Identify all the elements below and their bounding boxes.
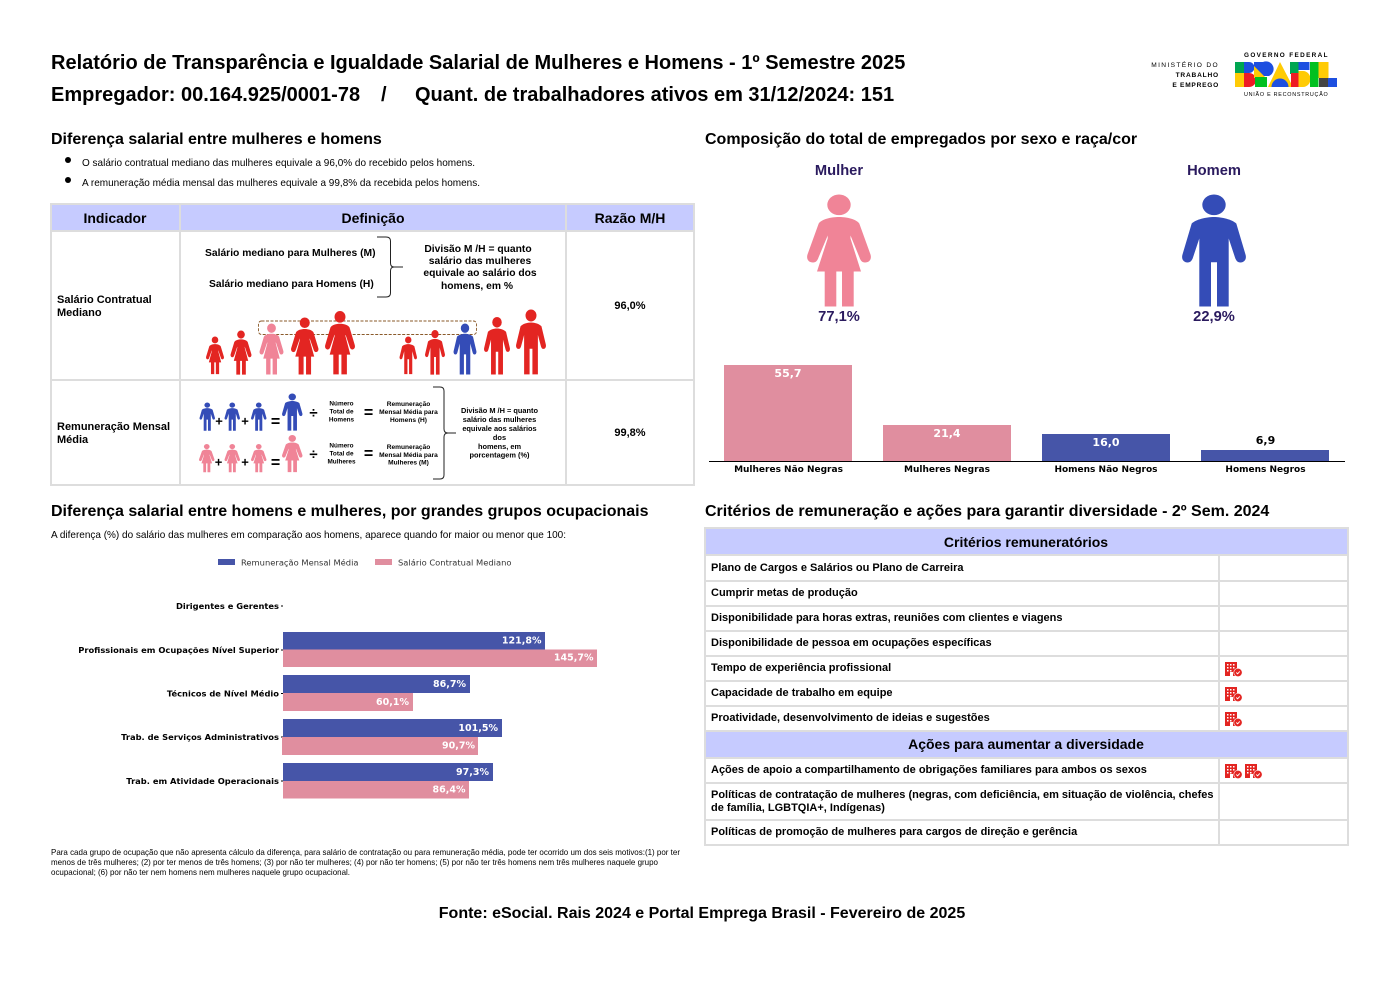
- definition: divisão M/H: equivale aos salários: [462, 424, 537, 433]
- row labels: Mediano: [57, 307, 102, 319]
- criteria rows: Cumprir metas de produção: [711, 587, 858, 599]
- bar chart: grupos ocupacionais: 145,7%: [554, 652, 594, 664]
- bar chart: sexo e raça/cor: Mulheres Negras: [904, 465, 990, 475]
- row labels: Média: [57, 434, 89, 446]
- icons: figures of men by salary: [400, 310, 546, 375]
- definition: remuneração média, homens: ÷: [309, 404, 318, 422]
- legend: Salário Contratual Mediano: [398, 558, 511, 568]
- definition: remuneração média, mulheres: Número: [329, 442, 354, 450]
- definition: remuneração média, homens: [200, 394, 438, 431]
- definition: divisão M/H: porcentagem (%): [470, 450, 530, 460]
- definition: remuneração média, homens: Total de: [329, 408, 354, 416]
- definition: remuneração média, homens: Mensal Média para: [379, 409, 438, 416]
- bar chart: grupos ocupacionais: Técnicos de Nível Médio: [167, 688, 279, 698]
- bar chart: grupos ocupacionais: 121,8%: [502, 636, 542, 646]
- footnote: Para cada grupo de ocupação que não apresenta cálculo da diferença, para salário de contratação ou para remuneração média, pode ter ocorrido um dos seis motivos:(1) por ter: [51, 847, 680, 857]
- definition: remuneração média, mulheres: =: [364, 446, 373, 462]
- panel: homem: Homem: [1187, 163, 1241, 179]
- definition: remuneração média, homens: Remuneração: [387, 401, 430, 408]
- ratio values: [614, 300, 646, 439]
- definition: salário contratual: Divisão M /H = quanto: [424, 244, 532, 255]
- action rows: [711, 764, 1214, 838]
- bar chart: sexo e raça/cor: Mulheres Não Negras: [734, 465, 843, 475]
- definition: remuneração média, mulheres: Mulheres (M): [388, 460, 429, 466]
- chart description: A diferença (%) do salário das mulheres em comparação aos homens, aparece quando for maior ou menor que 100:: [51, 530, 566, 541]
- logo: ministério do trabalho e emprego: [1151, 60, 1219, 89]
- criteria rows: Disponibilidade para horas extras, reuniões com clientes e viagens: [711, 612, 1063, 624]
- heading: composição: Composição do total de empregados por sexo e raça/cor: [705, 131, 1137, 148]
- bar chart: grupos ocupacionais: 60,1%: [376, 697, 409, 708]
- icons: company check: [1225, 662, 1262, 779]
- definition: salário contratual: Salário mediano para Homens (H): [209, 279, 374, 290]
- definition: remuneração média, mulheres: +: [215, 454, 223, 470]
- definition: remuneração média, mulheres: =: [271, 454, 280, 472]
- definition: remuneração média, homens: =: [271, 414, 280, 430]
- definition: remuneração média, homens: =: [364, 404, 373, 422]
- table header: Indicador: [83, 210, 147, 226]
- row labels: [57, 294, 170, 446]
- action rows: Políticas de promoção de mulheres para cargos de direção e gerência: [711, 826, 1078, 838]
- panel: mulher: [807, 163, 871, 325]
- definition: divisão M/H: Divisão M /H = quanto: [461, 406, 538, 415]
- definition: divisão M/H: [433, 387, 538, 479]
- bar chart: grupos ocupacionais: 101,5%: [458, 723, 498, 734]
- logo: ministério do trabalho e emprego: TRABALHO: [1176, 72, 1219, 79]
- logo: governo federal brasil: GOVERNO FEDERAL: [1244, 52, 1329, 59]
- legend: Remuneração Mensal Média: [241, 558, 359, 568]
- definition: remuneração média, mulheres: ÷: [309, 446, 318, 463]
- action rows: Ações de apoio a compartilhamento de obrigações familiares para ambos os sexos: [711, 764, 1147, 776]
- logo: governo federal brasil: [1235, 52, 1337, 98]
- definition: divisão M/H: dos: [493, 433, 506, 442]
- bar chart: grupos ocupacionais: 86,7%: [433, 679, 466, 690]
- criteria rows: Proatividade, desenvolvimento de ideias e sugestões: [711, 712, 990, 724]
- bar chart: sexo e raça/cor: Homens Negros: [1225, 465, 1306, 475]
- title: Quant. de trabalhadores ativos em 31/12/2024: 151: [415, 84, 894, 106]
- heading: diferença salarial: Diferença salarial entre mulheres e homens: [51, 131, 382, 148]
- bar chart: grupos ocupacionais: 86,4%: [433, 784, 466, 796]
- legend: [218, 558, 511, 568]
- definition: remuneração média, homens: Homens: [329, 416, 355, 424]
- definition: remuneração média, mulheres: +: [241, 454, 249, 470]
- definition: divisão M/H: homens, em: [478, 442, 521, 451]
- panel: mulher: Mulher: [815, 163, 863, 179]
- ratio values: 96,0%: [614, 300, 646, 312]
- definition: salário contratual: [205, 237, 537, 297]
- title: Empregador: 00.164.925/0001-78: [51, 84, 360, 106]
- definition: salário contratual: Salário mediano para Mulheres (M): [205, 248, 376, 259]
- criteria rows: Capacidade de trabalho em equipe: [711, 687, 893, 699]
- bar chart: sexo e raça/cor: Homens Não Negros: [1054, 465, 1158, 475]
- definition: salário contratual: homens, em %: [441, 281, 513, 292]
- title: /: [381, 84, 387, 106]
- criteria rows: Tempo de experiência profissional: [711, 662, 891, 674]
- table header: [83, 210, 665, 226]
- bullet list: [65, 157, 480, 189]
- footnote: menos de três mulheres; (2) por ter menos de três homens; (3) por não ter mulheres; (4) por não ter homens; (5) por não ter três homens nem três mulheres naquele grupo: [51, 857, 658, 867]
- header: critérios remuneratórios: Critérios remuneratórios: [944, 534, 1108, 550]
- bar chart: grupos ocupacionais: Profissionais em Ocupações Nível Superior: [78, 645, 280, 655]
- definition: salário contratual: equivale ao salário dos: [423, 268, 537, 279]
- definition: remuneração média, homens: Homens (H): [390, 417, 427, 424]
- criteria rows: [711, 562, 1063, 724]
- table: indicadores: [51, 204, 694, 485]
- bar chart: grupos ocupacionais: 90,7%: [442, 740, 475, 752]
- definition: remuneração média, homens: Número: [329, 400, 354, 408]
- panel: homem: [1182, 163, 1246, 325]
- bar chart: sexo e raça/cor: 16,0: [1092, 436, 1120, 449]
- title: [51, 52, 905, 106]
- bullet list: O salário contratual mediano das mulheres equivale a 96,0% do recebido pelos homens.: [82, 157, 475, 169]
- definition: remuneração média, mulheres: Mulheres: [327, 458, 356, 466]
- bar chart: sexo e raça/cor: 21,4: [933, 427, 961, 440]
- title: Relatório de Transparência e Igualdade Salarial de Mulheres e Homens - 1º Semestre 2025: [51, 52, 905, 74]
- icons: figures of women by salary: [206, 311, 355, 375]
- panel: homem: 22,9%: [1193, 309, 1235, 325]
- table header: Definição: [341, 210, 405, 226]
- definition: remuneração média, mulheres: Remuneração: [387, 444, 430, 451]
- table: critérios e ações: [705, 528, 1348, 845]
- action rows: de família, LGBTQIA+, Indígenas): [711, 802, 885, 814]
- source: Fonte: eSocial. Rais 2024 e Portal Emprega Brasil - Fevereiro de 2025: [439, 905, 965, 922]
- logo: ministério do trabalho e emprego: E EMPREGO: [1172, 82, 1219, 89]
- heading: critérios: Critérios de remuneração e ações para garantir diversidade - 2º Sem. 2024: [705, 503, 1269, 520]
- bar chart: grupos ocupacionais: Trab. de Serviços Administrativos: [121, 732, 279, 742]
- header: ações: Ações para aumentar a diversidade: [908, 736, 1144, 752]
- row labels: Salário Contratual: [57, 294, 152, 306]
- definition: salário contratual: salário das mulheres: [429, 256, 531, 267]
- bar chart: sexo e raça/cor: [709, 365, 1345, 475]
- bar chart: sexo e raça/cor: 6,9: [1256, 434, 1275, 447]
- bar chart: grupos ocupacionais: Trab. em Atividade Operacionais: [126, 776, 279, 786]
- table header: Razão M/H: [595, 210, 665, 226]
- action rows: Políticas de contratação de mulheres (negras, com deficiência, em situação de violência, chefes: [711, 789, 1214, 801]
- definition: remuneração média, homens: +: [215, 414, 223, 428]
- bar chart: grupos ocupacionais: 97,3%: [456, 767, 489, 778]
- logo: governo federal brasil: UNIÃO E RECONSTRUÇÃO: [1244, 91, 1328, 98]
- footnote: ocupacional; (6) por não ter nem homens nem mulheres naquele grupo ocupacional.: [51, 867, 350, 877]
- row labels: Remuneração Mensal: [57, 421, 170, 433]
- dashed highlight: [258, 321, 476, 334]
- definition: remuneração média, mulheres: [199, 435, 438, 472]
- definition: remuneração média, mulheres: Total de: [329, 450, 354, 458]
- panel: mulher: 77,1%: [818, 309, 860, 325]
- bar chart: sexo e raça/cor: 55,7: [774, 367, 802, 380]
- bar chart: grupos ocupacionais: [78, 601, 597, 798]
- definition: divisão M/H: salário das mulheres: [463, 415, 536, 424]
- definition: remuneração média, homens: +: [241, 414, 249, 428]
- ratio values: 99,8%: [614, 427, 646, 439]
- criteria rows: Disponibilidade de pessoa em ocupações específicas: [711, 637, 992, 649]
- footnote: [51, 847, 680, 877]
- bar chart: grupos ocupacionais: Dirigentes e Gerentes: [176, 601, 279, 611]
- bullet list: A remuneração média mensal das mulheres equivale a 99,8% da recebida pelos homens.: [82, 177, 480, 189]
- definition: remuneração média, mulheres: Mensal Média para: [379, 452, 438, 459]
- logo: ministério do trabalho e emprego: MINISTÉRIO DO: [1151, 60, 1219, 69]
- criteria rows: Plano de Cargos e Salários ou Plano de Carreira: [711, 562, 964, 574]
- heading: diferença por grupos ocupacionais: Diferença salarial entre homens e mulheres, por grandes grupos ocupacionais: [51, 503, 649, 520]
